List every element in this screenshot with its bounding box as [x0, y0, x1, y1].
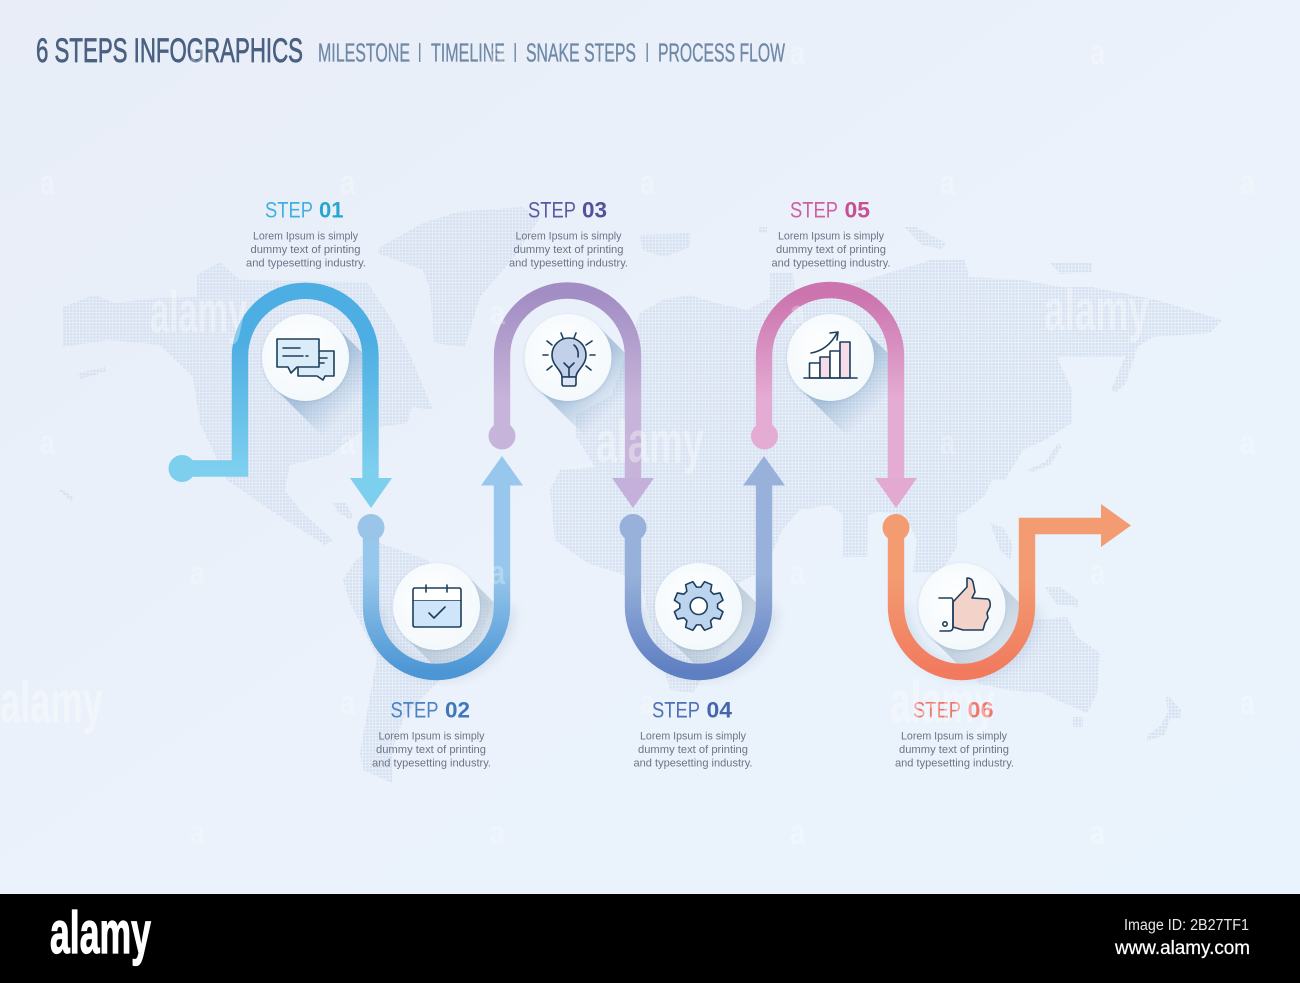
arrow path: step 01: [168, 291, 392, 508]
watermark: a: [40, 424, 56, 462]
soft path shadow: step 04: [639, 607, 770, 672]
icon: light bulb: [524, 314, 612, 401]
text: step 03: and typesetting industry.: [509, 258, 628, 270]
heading: step 05: 05: [844, 198, 870, 222]
watermark: a: [1090, 814, 1106, 852]
panel: step 05: [751, 198, 917, 508]
text: step 05: and typesetting industry.: [772, 258, 890, 270]
long shadow: step 04: [668, 576, 756, 664]
heading: step 01: 01: [319, 198, 344, 222]
long shadow: step 03: [538, 327, 625, 430]
watermark: a: [190, 554, 206, 592]
watermark: a: [640, 684, 656, 722]
title: [36, 32, 785, 70]
arrow path: step 05: [751, 290, 917, 508]
title: 6 STEPS INFOGRAPHICS: [36, 32, 303, 70]
watermark: alamy: [150, 280, 247, 345]
heading: step 06: 06: [968, 698, 994, 722]
text: step 05: Lorem Ipsum is simply: [778, 230, 884, 242]
panel: step 06: [882, 504, 1131, 770]
text: step 02: dummy text of printing: [376, 744, 486, 756]
watermark: alamy: [0, 670, 103, 735]
icon: bar chart: [787, 314, 874, 401]
long shadow: step 06: [930, 580, 1019, 664]
text: step 02: and typesetting industry.: [372, 758, 491, 770]
text: step 01: and typesetting industry.: [246, 258, 366, 270]
text: step 06: dummy text of printing: [899, 744, 1009, 756]
watermark: a: [940, 164, 956, 202]
watermark: a: [340, 164, 356, 202]
text: step 04: and typesetting industry.: [634, 758, 752, 770]
watermark: a: [490, 34, 506, 72]
arrow path: step 06: [882, 504, 1131, 672]
watermark: a: [340, 424, 356, 462]
long shadow: step 01: [275, 327, 362, 432]
title: PROCESS FLOW: [658, 40, 785, 68]
watermark: a: [790, 554, 806, 592]
watermark: a: [40, 164, 56, 202]
text: step 03: Lorem Ipsum is simply: [516, 230, 622, 242]
text: step 06: [895, 730, 1014, 770]
soft path shadow: step 06: [902, 607, 1033, 672]
text: step 04: Lorem Ipsum is simply: [640, 730, 746, 742]
long shadow: step 02: [406, 576, 494, 664]
watermark: a: [1090, 554, 1106, 592]
icon: gear: [655, 563, 742, 650]
watermark: a: [190, 34, 206, 72]
icon: chat bubbles: [262, 314, 349, 401]
watermark: a: [490, 294, 506, 332]
watermark: a: [1240, 424, 1256, 462]
panel: step 02: [358, 456, 527, 770]
text: step 06: Lorem Ipsum is simply: [901, 730, 1007, 742]
watermark: alamy: [1044, 278, 1149, 343]
heading: step 04: STEP: [652, 698, 700, 722]
text: step 05: dummy text of printing: [776, 244, 886, 256]
arrow path: step 02: [358, 456, 523, 672]
watermark: a: [490, 554, 506, 592]
text: step 05: [772, 230, 890, 270]
text: step 02: [372, 730, 491, 770]
heading: step 06: STEP: [913, 698, 961, 722]
dotted world map: [59, 207, 1222, 783]
heading: step 05: STEP: [790, 198, 838, 222]
arrow path: step 03: [488, 290, 654, 508]
heading: step 02: STEP: [390, 698, 438, 722]
footer bar: www.alamy.com: [1114, 938, 1250, 959]
text: step 06: and typesetting industry.: [895, 758, 1014, 770]
text: step 01: Lorem Ipsum is simply: [253, 230, 358, 242]
panel: step 04: [620, 456, 789, 770]
text: step 04: [634, 730, 752, 770]
icon: calendar: [393, 563, 480, 650]
icon: thumbs up: [918, 563, 1006, 650]
heading: step 03: STEP: [528, 198, 576, 222]
watermark: a: [640, 164, 656, 202]
watermark: a: [190, 814, 206, 852]
long shadow: step 05: [800, 327, 888, 430]
title: MILESTONE: [318, 40, 410, 68]
text: step 03: [509, 230, 628, 270]
watermark: alamy: [890, 670, 995, 735]
watermark: a: [790, 34, 806, 72]
watermark: a: [790, 814, 806, 852]
footer bar: [0, 894, 1300, 983]
panel: step 03: [488, 198, 654, 508]
title: TIMELINE: [431, 40, 505, 68]
text: step 03: dummy text of printing: [514, 244, 624, 256]
footer bar: Image ID: 2B27TF1: [1124, 917, 1249, 934]
watermark: a: [940, 424, 956, 462]
text: step 04: dummy text of printing: [638, 744, 748, 756]
watermark: a: [340, 684, 356, 722]
text: step 01: dummy text of printing: [250, 244, 360, 256]
watermark: a: [790, 294, 806, 332]
text: step 01: [246, 230, 366, 270]
text: step 02: Lorem Ipsum is simply: [378, 730, 485, 742]
watermark: a: [1090, 34, 1106, 72]
watermark: a: [1240, 684, 1256, 722]
heading: step 02: 02: [445, 698, 470, 722]
heading: step 01: STEP: [265, 198, 313, 222]
watermark: a: [490, 814, 506, 852]
heading: step 04: 04: [706, 698, 732, 722]
watermark: a: [1240, 164, 1256, 202]
title: SNAKE STEPS: [526, 40, 636, 68]
watermark: alamy: [596, 410, 704, 475]
panel: step 01: [168, 198, 392, 508]
heading: step 03: 03: [582, 198, 607, 222]
arrow path: step 04: [620, 456, 785, 672]
soft path shadow: step 02: [377, 607, 508, 672]
footer bar: alamy: [50, 900, 151, 966]
